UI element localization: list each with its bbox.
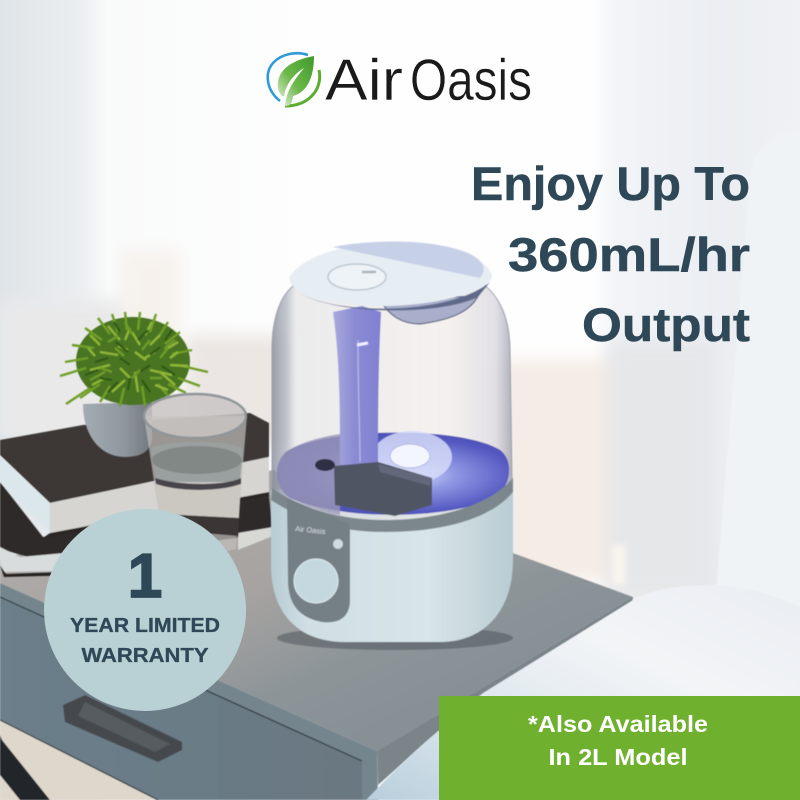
drawer front [0,597,362,800]
contact shadow [277,626,513,650]
warranty badge [44,509,246,711]
callout line 1: *Also Available [528,711,708,737]
callout line 2: In 2L Model [548,744,688,770]
bed linen [366,585,800,800]
warranty label line 2: WARRANTY [82,645,209,667]
headline line 1: Enjoy Up To [471,157,750,210]
pot [83,402,152,457]
legs and floor below drawer [0,720,160,800]
water base [277,433,509,515]
bedside table [0,470,633,800]
water tube [333,306,381,465]
tank [272,282,512,524]
side face [377,597,633,785]
logo wordmark [325,48,532,113]
humidifier [271,242,513,650]
warranty label line 1: YEAR LIMITED [70,615,220,637]
front band [0,583,378,800]
drawer handle [63,695,182,762]
control panel [287,498,350,622]
logo icon [268,53,320,106]
vent [315,459,335,471]
base body [271,480,513,642]
headline line 2: 360mL/hr [508,228,750,281]
books stack [0,413,273,577]
button [333,539,343,549]
logo [268,48,532,113]
grey band [271,478,513,532]
glass of water [144,394,247,552]
headboard at right [716,130,800,610]
logo wordmark: Oasis [410,48,532,113]
logo on panel: Air Oasis [295,524,326,536]
lower book [0,482,273,563]
upper book [0,413,269,503]
lid [294,282,490,310]
warranty number: 1 [128,542,162,611]
green callout [439,696,800,800]
lid tray [380,296,478,324]
foliage [60,312,208,406]
potted plant [60,312,208,457]
table top [0,470,633,751]
headline line 3: Output [582,298,750,351]
headline [471,157,750,351]
dial [294,559,338,603]
tube foot [334,462,432,516]
logo wordmark: Air [325,48,403,113]
